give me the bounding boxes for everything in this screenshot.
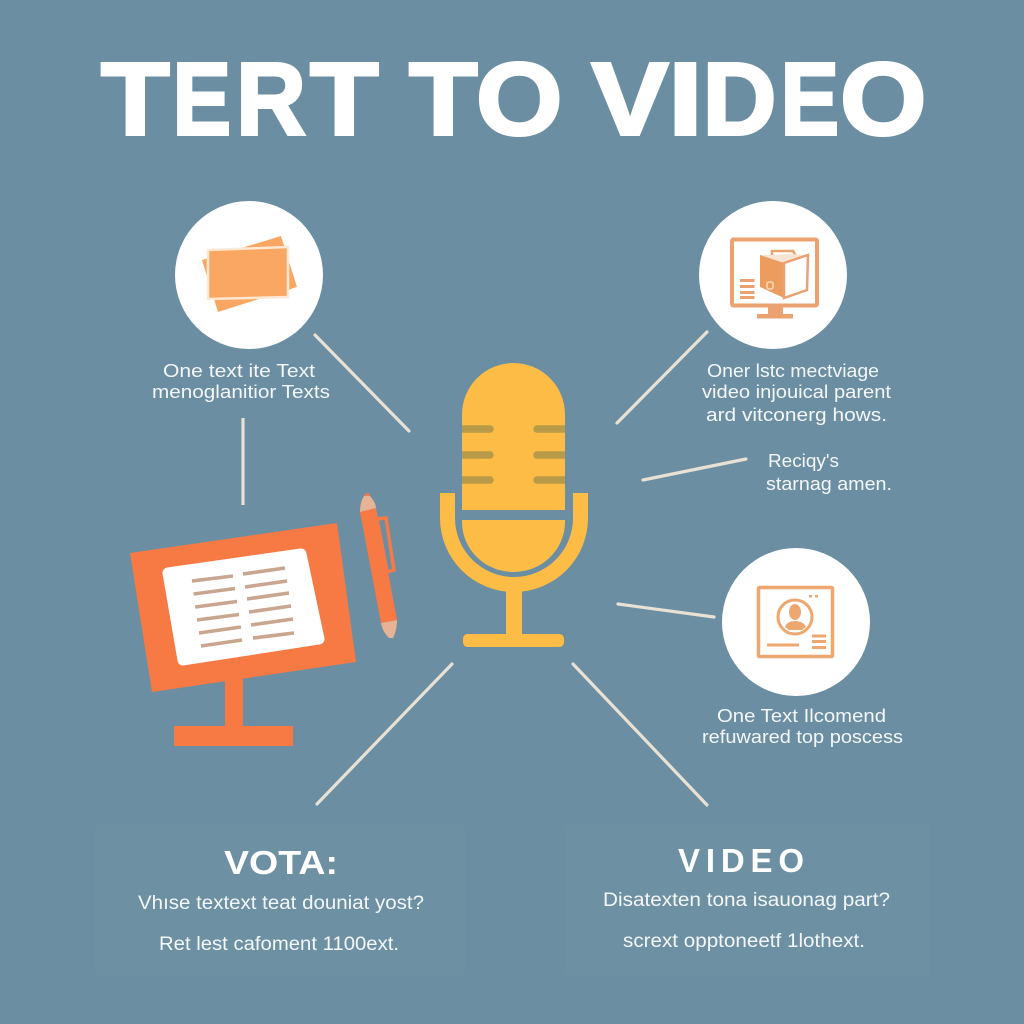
text: right caption: Oner lstc mectviage	[707, 361, 879, 381]
text: right caption: ard vitconerg hows.	[706, 405, 887, 425]
text: VIDEO line 2: scrext opptoneetf 1lothext.	[623, 931, 865, 952]
text: recipy caption	[766, 451, 892, 494]
title: R	[236, 42, 306, 156]
text: recipy caption: starnag amen.	[766, 474, 892, 494]
text: profile caption: refuwared top poscess	[702, 727, 903, 747]
text: VIDEO line 1: Disatexten tona isauonag part?	[603, 890, 890, 911]
connector lines	[243, 332, 746, 805]
title: E	[172, 42, 231, 156]
text: left caption: One text ite Text	[163, 361, 315, 381]
title: O	[476, 42, 562, 156]
text: recipy caption: Reciqy's	[768, 451, 839, 471]
text: VOTA line 2: Ret lest cafoment 1100ext.	[159, 934, 399, 955]
panel: VIDEO	[565, 825, 930, 975]
title: T	[310, 42, 379, 156]
panel: VOTA	[95, 825, 465, 975]
text: left caption	[152, 361, 330, 402]
icon: pen	[360, 493, 397, 638]
icon: text cards circle	[175, 201, 323, 349]
heading: VIDEO: VIDEO	[678, 842, 804, 879]
text: right caption: video injouical parent	[702, 382, 891, 402]
title: O	[840, 42, 926, 156]
title: T	[409, 42, 478, 156]
title: E	[780, 42, 839, 156]
title: I	[668, 42, 703, 156]
title: V	[592, 42, 668, 156]
heading: VOTA: VOTA:	[224, 844, 338, 881]
text: right caption	[702, 361, 891, 425]
title: T	[101, 42, 170, 156]
icon: microphone	[440, 363, 588, 647]
icon: orange monitor with document	[130, 523, 356, 746]
text: profile caption	[702, 706, 903, 747]
text: VOTA line 1: Vhıse textext teat douniat yost?	[138, 893, 424, 914]
title: D	[702, 42, 776, 156]
text: left caption: menoglanitior Texts	[152, 382, 330, 402]
icon: profile card circle	[722, 548, 870, 696]
text: profile caption: One Text Ilcomend	[717, 706, 886, 726]
icon: video monitor circle	[699, 201, 847, 349]
